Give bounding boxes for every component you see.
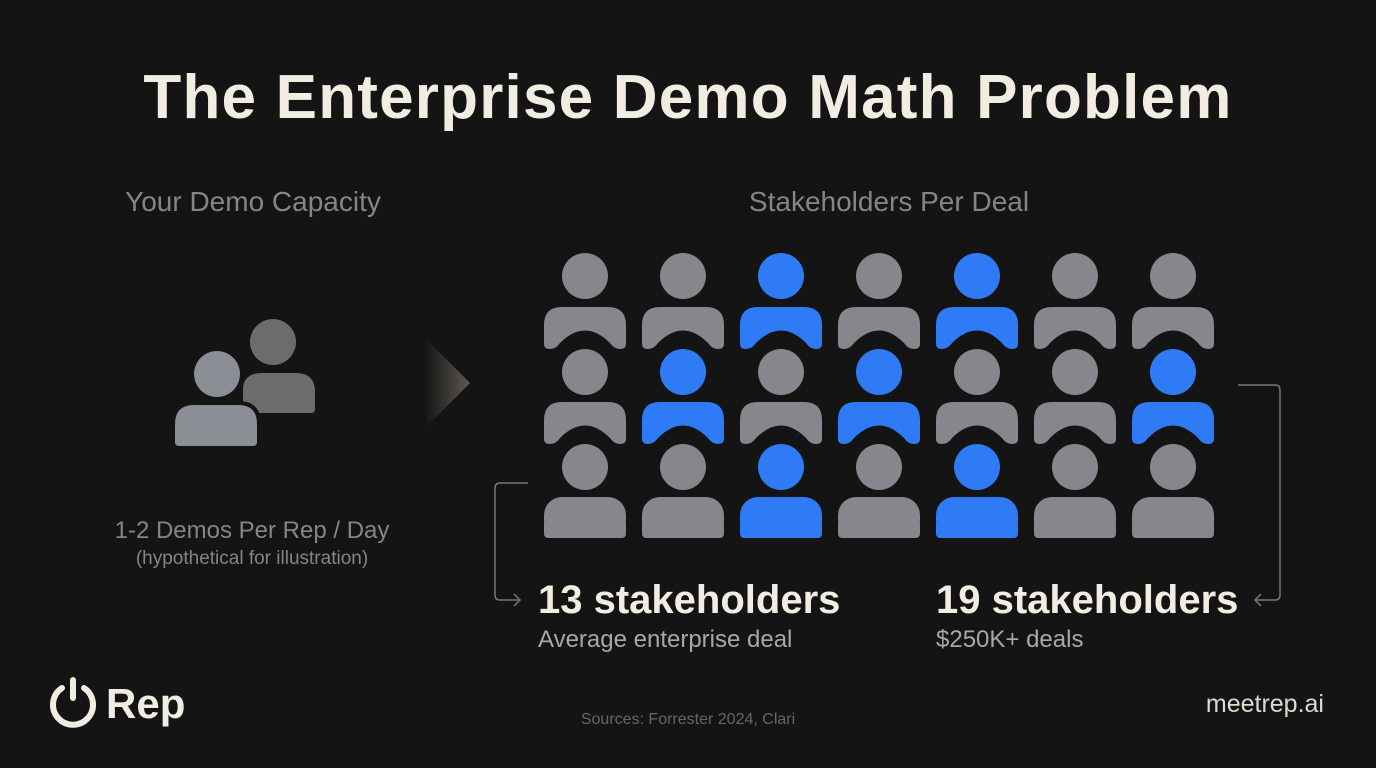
bracket right: [1238, 385, 1280, 606]
row 3: [544, 444, 1214, 538]
text: demos per rep: 1-2 Demos Per Rep / Day: [115, 517, 389, 544]
row 1: [544, 253, 1214, 349]
text: demos per rep: (hypothetical for illustration): [136, 548, 368, 569]
url: meetrep.ai: [1206, 690, 1324, 718]
sources: Sources: Forrester 2024, Clari: [581, 711, 795, 728]
icon: power logo: [53, 680, 93, 725]
stat: 13 stakeholders: Average enterprise deal: [538, 626, 792, 653]
text: demos per rep: [115, 517, 390, 569]
bracket left: [495, 483, 528, 606]
title: The Enterprise Demo Math Problem: [143, 63, 1233, 132]
heading: stakeholders per deal: Stakeholders Per Deal: [749, 186, 1029, 217]
stat: 19 stakeholders: 19 stakeholders: [936, 578, 1238, 622]
stat: 19 stakeholders: [936, 578, 1238, 653]
stat: 13 stakeholders: 13 stakeholders: [538, 578, 840, 622]
heading: your demo capacity: Your Demo Capacity: [125, 186, 381, 217]
logo text: Rep: [106, 680, 185, 727]
arrow: [425, 338, 470, 428]
stat: 13 stakeholders: [538, 578, 840, 653]
row 2: [544, 349, 1214, 444]
icon: demo capacity people: [171, 319, 315, 450]
stat: 19 stakeholders: $250K+ deals: [936, 626, 1083, 653]
